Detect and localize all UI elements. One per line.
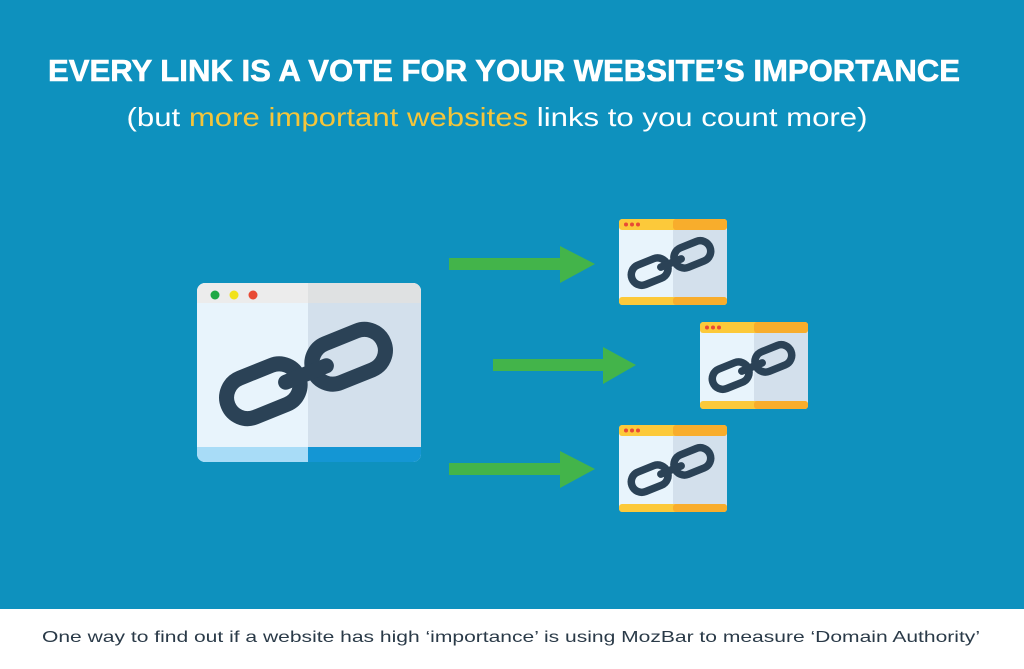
arrow 2 — [493, 347, 636, 384]
arrow 1 — [449, 246, 595, 283]
title: EVERY LINK IS A VOTE FOR YOUR WEBSITE’S IMPORTANCE — [48, 53, 960, 88]
footer — [0, 609, 1024, 669]
small browser 1 — [619, 219, 727, 305]
footer: One way to find out if a website has high ‘importance’ is using MozBar to measure ‘Domain Authority’ — [42, 629, 980, 646]
small browser 3 — [619, 425, 727, 512]
main browser window — [197, 283, 421, 462]
small browser 2 — [700, 322, 808, 409]
arrow 3 — [449, 451, 595, 488]
subtitle: (but more important websites links to you count more) — [126, 102, 868, 132]
